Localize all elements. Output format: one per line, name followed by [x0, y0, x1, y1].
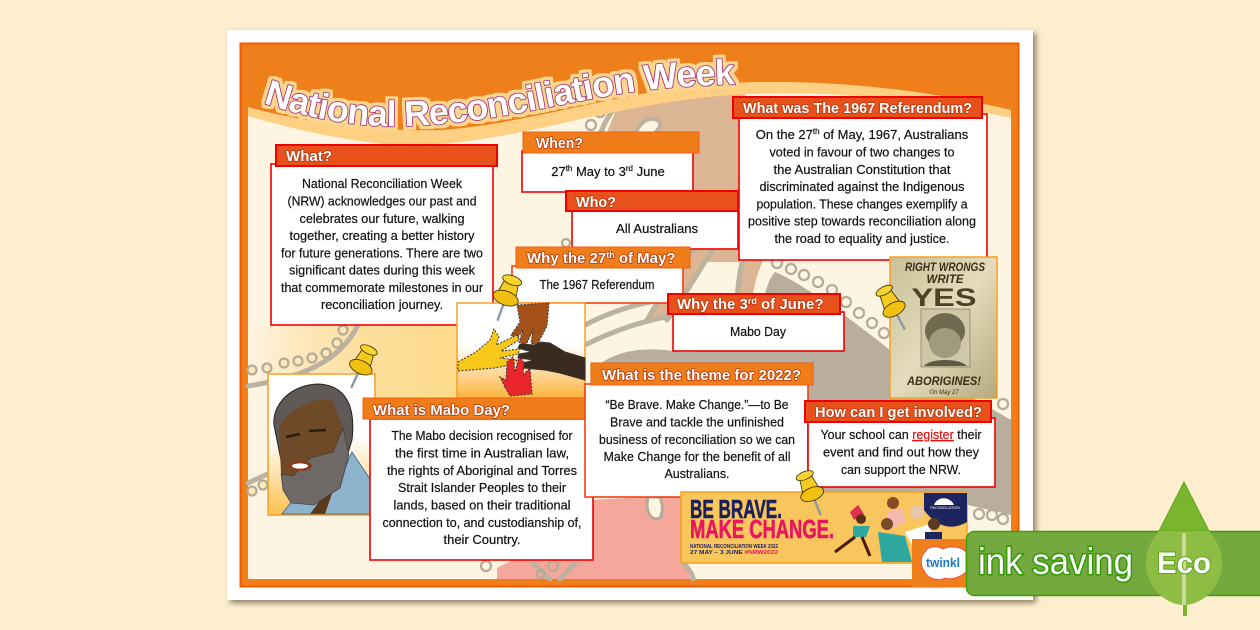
baby photo [921, 309, 970, 367]
heading: Why the 3rd: rd [748, 296, 757, 306]
wave band under title [248, 82, 1011, 145]
heading: What? [276, 145, 497, 166]
text: theme body [599, 397, 795, 481]
text: Mabo body: connection to, and custodianship of, [382, 515, 582, 530]
illustrated people: RECONCILIATION [930, 506, 960, 510]
text: Referendum body: of May, 1967, Australians [820, 127, 969, 142]
text: When body: th [566, 164, 572, 173]
heading: Why the 3rd: of June? [757, 296, 824, 313]
twinkl logo [912, 539, 968, 587]
panel: Who? [566, 191, 738, 249]
text: What body: together, creating a better history [290, 228, 475, 243]
icon: red hand [500, 357, 532, 396]
text: 27th body: The 1967 Referendum [540, 277, 654, 292]
text: 3rd body: Mabo Day [730, 324, 786, 339]
text: What body: celebrates our future, walking [300, 211, 464, 226]
heading: Why the 27th: Why the 27 [527, 250, 606, 267]
text: How body: can support the NRW. [841, 462, 961, 477]
heading: When?: When? [536, 135, 583, 152]
icon: push pin near banner [792, 467, 832, 520]
icon: push pin near hands [485, 272, 526, 325]
heading: What was: What was The 1967 Referendum? [743, 100, 972, 117]
illustrated people [835, 493, 967, 562]
image: Be Brave Make Change banner: MAKE CHANGE. [690, 514, 834, 544]
icon: push pin near portrait [340, 341, 381, 393]
panel: How can I get involved? [805, 401, 995, 487]
text: Mabo body: their Country. [444, 532, 520, 547]
hair [274, 384, 353, 480]
eco ink saving badge [966, 482, 1260, 616]
image: Eddie Mabo portrait [268, 374, 375, 515]
image: 1967 poster: YES [912, 284, 976, 312]
text: Referendum body: On the 27 [756, 127, 813, 142]
panel: When? [522, 132, 699, 192]
text: When body: 27 [551, 164, 566, 179]
heading: What?: What? [286, 148, 332, 165]
white poster sheet [227, 30, 1033, 600]
heading: What is Mabo Day?: What is Mabo Day? [373, 402, 510, 419]
text: Mabo body: the rights of Aboriginal and Torres [387, 463, 577, 478]
panel: What is Mabo Day? [363, 398, 593, 560]
text: What body: for future generations. There are two [281, 246, 483, 260]
image: Be Brave Make Change banner: 27 MAY – 3 JUNE #NRW2022 [690, 550, 778, 556]
text: Referendum body: discriminated against the Indigenous [760, 179, 965, 194]
heading: theme: What is the theme for 2022? [602, 367, 801, 384]
text: Mabo body: The Mabo decision recognised for [392, 428, 573, 443]
eco ink saving badge: Eco [1157, 547, 1211, 580]
icon: leaf [1146, 482, 1222, 616]
text: What body: National Reconciliation Week [302, 176, 462, 191]
text: Referendum body: th [813, 127, 820, 136]
heading: theme [591, 363, 813, 385]
orange frame [240, 44, 1018, 586]
text: When body: May to 3 [572, 164, 626, 179]
title: National Reconciliation Week [261, 54, 740, 130]
image: Be Brave Make Change banner [681, 492, 967, 563]
face [279, 399, 342, 488]
text: When body: June [633, 164, 665, 179]
icon: black hand [518, 342, 585, 380]
icon: push pin near poster [872, 282, 915, 335]
text: Mabo body [382, 428, 582, 547]
text: theme body: Australians. [664, 466, 730, 481]
image: 1967 poster: WRITE [926, 274, 964, 286]
shirt [282, 452, 372, 514]
text: What body: significant dates during this week [289, 262, 475, 278]
twinkl logo: twinkl [926, 555, 960, 570]
heading: Why the 3rd [668, 294, 840, 314]
heading: When? [523, 132, 699, 153]
text: theme body: “Be Brave. Make Change.”—to Be [606, 397, 788, 412]
heading: How can I get involved?: How can I get involved? [815, 404, 982, 421]
text: How body: Your school can register their [820, 427, 982, 442]
panel: Why the 3rd of June? [668, 294, 844, 351]
text: Referendum body: voted in favour of two changes to [770, 144, 954, 160]
text: Mabo body: the first time in Australian law, [395, 446, 569, 460]
text: Who body: All Australians [616, 221, 698, 236]
panel: What is the theme for 2022? [585, 363, 813, 497]
text: theme body: Brave and tackle the unfinished [610, 414, 784, 430]
text: What body [281, 176, 484, 312]
badge text: ink saving [978, 541, 1133, 582]
panel: What was The 1967 Referendum? [733, 97, 987, 260]
text: When body: rd [626, 164, 633, 173]
heading: Why the 27th [516, 247, 690, 268]
heading: Who?: Who? [576, 194, 616, 211]
image: hands [457, 303, 585, 398]
text: Mabo body: lands, based on their traditional [394, 498, 571, 512]
banner headline: BE BRAVE. [690, 494, 782, 524]
text: Referendum body: population. These changes exemplify a [756, 196, 968, 212]
text: Mabo body: Strait Islander Peoples to their [398, 480, 567, 495]
image: Be Brave Make Change banner: NATIONAL RECONCILIATION WEEK 2022 [690, 544, 778, 550]
text: Referendum body [748, 127, 976, 246]
text: What body: reconciliation journey. [321, 297, 443, 312]
text: theme body: business of reconciliation so we can [599, 432, 795, 447]
panel: Why the 27th of May? [512, 247, 690, 303]
heading: What is Mabo Day? [363, 398, 585, 419]
text: How body: event and find out how they [823, 444, 979, 460]
eyes and mouth [286, 430, 326, 437]
heading: Why the 27th: of May? [615, 250, 676, 267]
image: 1967 poster: On May 27 [929, 390, 959, 396]
text: theme body: Make Change for the benefit of all [604, 449, 791, 464]
heading: Why the 27th: th [606, 250, 615, 260]
image: 1967 poster: ABORIGINES! [906, 374, 981, 388]
poster text: RIGHT WRONGS [905, 262, 985, 274]
icon: yellow hand [458, 329, 520, 371]
heading: Who? [566, 191, 738, 211]
text: Referendum body: the road to equality and justice. [774, 231, 950, 246]
panel: What? [271, 145, 497, 325]
heading: Why the 3rd: Why the 3 [677, 296, 748, 313]
image: 1967 poster [890, 257, 997, 398]
inner background with aboriginal-art hands [248, 92, 1011, 579]
text: What body: (NRW) acknowledges our past and [288, 194, 476, 208]
text: What body: that commemorate milestones in our [281, 280, 484, 295]
icon: brown hand [511, 303, 549, 345]
text: Referendum body: the Australian Constitution that [774, 162, 951, 177]
text: Referendum body: positive step towards reconciliation along [748, 214, 976, 228]
text: How body [820, 427, 982, 477]
beard [281, 428, 349, 505]
